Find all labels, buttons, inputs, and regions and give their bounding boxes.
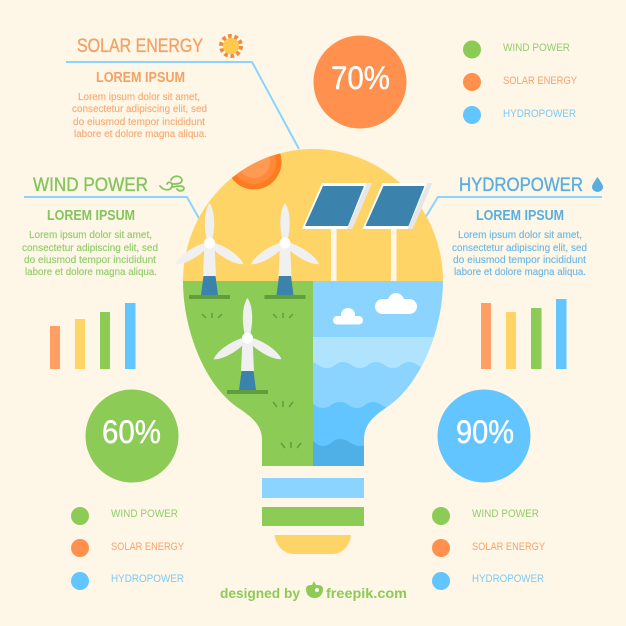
- badge: 90%: [438, 390, 530, 482]
- hydro body text: Lorem ipsum dolor sit amet,: [458, 229, 582, 241]
- hydro body text: do eiusmod tempor incididunt: [453, 254, 586, 266]
- panel: solar energy: [72, 36, 241, 140]
- badge: 60%: [86, 390, 178, 482]
- legend: top right: HYDROPOWER: [503, 108, 576, 120]
- wind subheading: LOREM IPSUM: [47, 208, 135, 224]
- light bulb illustration: [176, 149, 443, 554]
- legend: bottom right: SOLAR ENERGY: [472, 541, 546, 553]
- icon: freepik mascot: [306, 581, 323, 598]
- panel: hydropower: [452, 175, 603, 278]
- wind turbine 1: [173, 203, 246, 299]
- grass tufts: [202, 313, 301, 448]
- solar heading: SOLAR ENERGY: [77, 36, 203, 57]
- badge: 60%: 60%: [102, 414, 161, 450]
- icon: sun: [221, 36, 241, 56]
- icon: water drop: [592, 177, 603, 192]
- hydro body text: consectetur adipiscing elit, sed: [452, 242, 587, 254]
- hydro subheading: LOREM IPSUM: [476, 208, 564, 224]
- hydro heading: HYDROPOWER: [459, 175, 583, 196]
- wind body text: labore et dolore magna aliqua.: [25, 266, 157, 278]
- credit: freepik logo: [220, 581, 407, 601]
- solar body text: do eiusmod tempor incididunt: [73, 116, 205, 128]
- icon: wind: [160, 176, 184, 191]
- wind body text: do eiusmod tempor incididunt: [24, 254, 156, 266]
- bar chart: right: [481, 299, 566, 369]
- legend: top right: WIND POWER: [503, 42, 570, 54]
- wind heading: WIND POWER: [33, 175, 148, 196]
- connector lines: [24, 62, 602, 222]
- badge: 70%: [314, 36, 406, 128]
- legend: top right: [463, 40, 578, 124]
- bulb base: [262, 478, 364, 554]
- wind turbine 2: [249, 203, 321, 299]
- solar body text: Lorem ipsum dolor sit amet,: [78, 91, 200, 103]
- legend: bottom right: [432, 507, 546, 590]
- solar body text: labore et dolore magna aliqua.: [74, 128, 207, 140]
- legend: top right: SOLAR ENERGY: [503, 75, 578, 87]
- solar body text: [72, 91, 207, 140]
- badge: 90%: 90%: [456, 414, 514, 450]
- bar chart: left: [50, 303, 136, 369]
- legend: bottom left: [71, 507, 185, 590]
- wind body text: consectetur adipiscing elit, sed: [22, 242, 158, 254]
- clouds: [333, 293, 417, 324]
- legend: bottom left: SOLAR ENERGY: [111, 541, 185, 553]
- wind body text: [22, 229, 158, 278]
- solar subheading: LOREM IPSUM: [96, 70, 185, 86]
- legend: bottom right: HYDROPOWER: [472, 573, 544, 585]
- hydro body text: [452, 229, 587, 278]
- bulb glass fill: [183, 149, 443, 466]
- panel: wind power: [22, 175, 184, 278]
- solar body text: consectetur adipiscing elit, sed: [72, 103, 207, 115]
- solar panels: [302, 183, 432, 281]
- hydro body text: labore et dolore magna aliqua.: [454, 266, 586, 278]
- wind body text: Lorem ipsum dolor sit amet,: [29, 229, 152, 241]
- legend: bottom left: HYDROPOWER: [111, 573, 184, 585]
- badge: 70%: 70%: [331, 60, 390, 96]
- wind turbine 3: [211, 298, 284, 394]
- credit: freepik logo: freepik.com: [326, 585, 407, 601]
- legend: bottom right: WIND POWER: [472, 508, 539, 520]
- legend: bottom left: WIND POWER: [111, 508, 178, 520]
- credit: freepik logo: designed by: [220, 585, 300, 601]
